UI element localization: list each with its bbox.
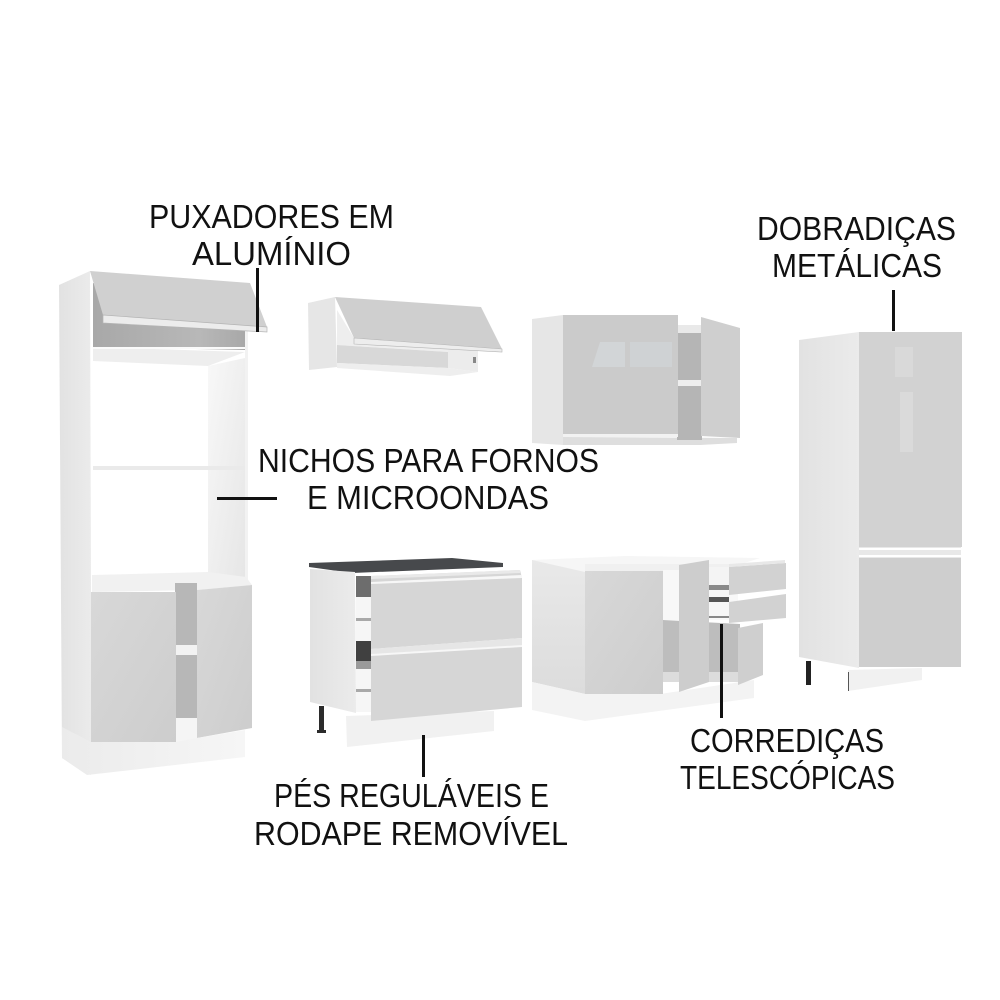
panel: tall oven cabinet xyxy=(59,271,267,775)
callout: pés reguláveis e rodape removível: PÉS REGULÁVEIS E xyxy=(274,777,549,814)
callout: puxadores em alumínio: PUXADORES EM xyxy=(149,198,394,235)
panel: tall fridge cabinet xyxy=(799,332,962,691)
left door xyxy=(585,571,663,694)
right inner wall xyxy=(208,358,245,580)
callout: nichos para fornos e microondas: E MICROONDAS xyxy=(307,479,549,516)
right frame edge xyxy=(245,330,248,585)
top drawer xyxy=(371,570,522,649)
panel: drawer base cabinet xyxy=(309,558,522,747)
callout: corrediças telescópicas xyxy=(680,624,895,796)
gap rail xyxy=(371,638,522,654)
middle door xyxy=(679,560,709,692)
callout: corrediças telescópicas: CORREDIÇAS xyxy=(690,722,884,759)
upper niche interior xyxy=(93,283,245,350)
callout: dobradiças metálicas xyxy=(757,210,956,331)
middle shelf xyxy=(93,466,245,470)
callout: nichos para fornos e microondas xyxy=(217,442,599,516)
panel: upper flap cabinet xyxy=(308,297,502,376)
dark countertop xyxy=(309,558,503,573)
callout: pés reguláveis e rodape removível xyxy=(254,735,568,852)
panel: corner base cabinet xyxy=(532,556,786,721)
plinth xyxy=(62,727,245,775)
lower door xyxy=(859,558,961,667)
callout: pés reguláveis e rodape removível: RODAPE REMOVÍVEL xyxy=(254,815,568,852)
drawer rails xyxy=(709,567,729,585)
bottom drawer xyxy=(371,645,522,721)
interior xyxy=(663,570,738,620)
plinth xyxy=(346,711,494,747)
right door xyxy=(738,623,763,685)
callout: nichos para fornos e microondas: NICHOS PARA FORNOS xyxy=(258,442,599,479)
callout: puxadores em alumínio: ALUMÍNIO xyxy=(192,235,351,272)
plinth xyxy=(532,680,754,721)
lower interior xyxy=(175,583,197,738)
lift-up flap door with aluminium handle xyxy=(90,271,267,332)
lower base shelf xyxy=(92,572,252,592)
top xyxy=(532,556,760,572)
cabinet side xyxy=(310,569,356,713)
metal foot xyxy=(319,706,324,730)
upper door xyxy=(859,332,962,547)
callout: puxadores em alumínio xyxy=(149,198,394,332)
panel: upper two-door cabinet xyxy=(532,315,740,445)
side panel xyxy=(532,560,585,694)
drawer interiors xyxy=(356,576,371,601)
callout: dobradiças metálicas: DOBRADIÇAS xyxy=(757,210,956,247)
open drawers xyxy=(729,563,786,595)
cabinet side and frame xyxy=(59,271,91,775)
callout: corrediças telescópicas: TELESCÓPICAS xyxy=(680,759,895,796)
left lower door xyxy=(91,592,176,742)
handle rail xyxy=(859,547,961,558)
right lower door xyxy=(197,585,252,738)
callout: dobradiças metálicas: METÁLICAS xyxy=(772,247,942,284)
